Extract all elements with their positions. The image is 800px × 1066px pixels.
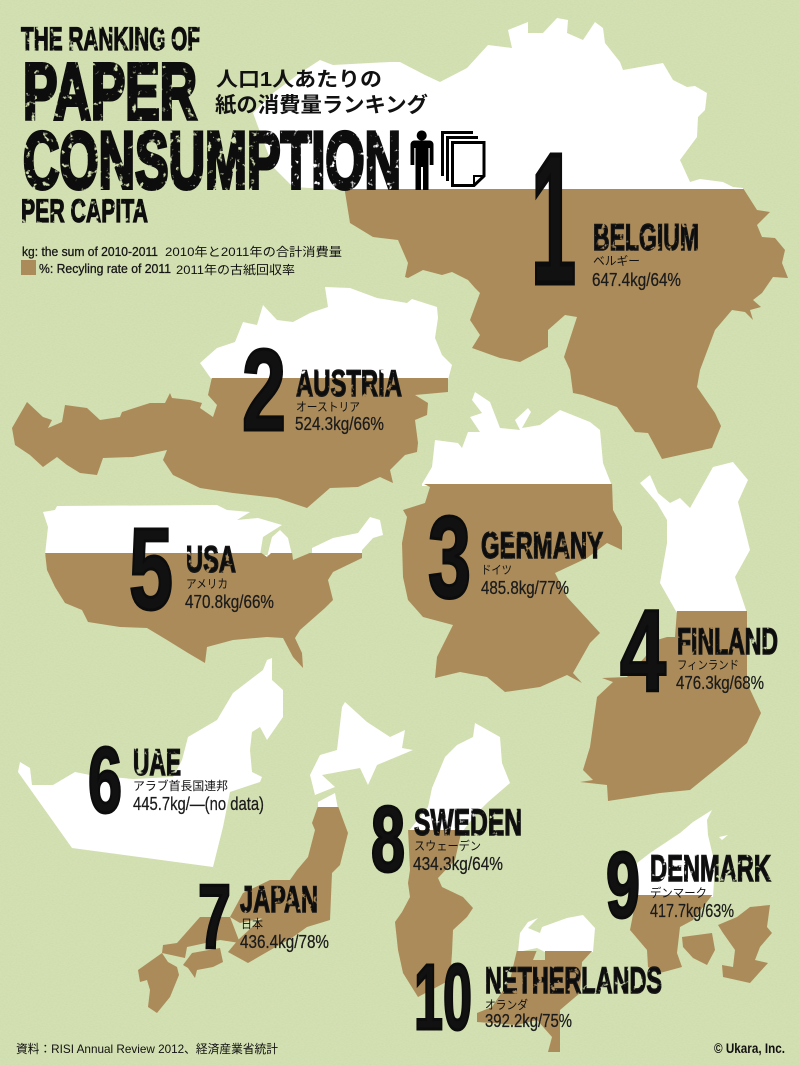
rank 5: USA: アメリカ (186, 577, 228, 591)
rank 1: Belgium: BELGIUM (593, 217, 699, 258)
rank 1: Belgium (531, 116, 699, 323)
rank 10: Netherlands (414, 945, 662, 1049)
rank 2: Austria: AUSTRIA (296, 363, 402, 404)
japanese heading: 紙の消費量ランキング (215, 93, 428, 117)
rank 7: Japan (198, 867, 329, 968)
rank 3: Germany: 485.8kg/77% (481, 578, 569, 598)
rank 4: Finland: 476.3kg/68% (676, 673, 764, 693)
rank 6: UAE: 6 (88, 728, 122, 832)
rank 6: UAE: 445.7kg/—(no data) (133, 794, 264, 814)
rank 7: Japan: 日本 (241, 917, 263, 931)
title: The Ranking of Paper Consumption per Capita: THE RANKING OF (21, 21, 200, 57)
map: UAE, no data (18, 658, 283, 867)
rank 1: Belgium: 647.4kg/64% (592, 270, 681, 290)
rank 5: USA (129, 504, 274, 634)
rank 7: Japan: JAPAN (240, 879, 318, 920)
rank 1: Belgium: 1 (531, 116, 576, 323)
rank 10: Netherlands: オランダ (485, 997, 528, 1012)
title: The Ranking of Paper Consumption per Capita: CONSUMPTION (23, 116, 401, 206)
rank 1: Belgium: ベルギー (593, 254, 640, 268)
icon: person (410, 130, 434, 190)
title: The Ranking of Paper Consumption per Capita: PER CAPITA (21, 193, 148, 229)
map: Sweden, 64% recycled (395, 723, 510, 997)
rank 3: Germany (428, 492, 603, 622)
rank 2: Austria: 524.3kg/66% (295, 414, 384, 434)
legend: 2010年と2011年の合計消費量 (165, 244, 342, 259)
rank 6: UAE: アラブ首長国連邦 (133, 778, 228, 793)
rank 3: Germany: GERMANY (481, 525, 603, 566)
rank 10: Netherlands: 392.2kg/75% (485, 1011, 572, 1031)
rank 5: USA: 470.8kg/66% (185, 592, 274, 612)
rank 4: Finland: 4 (620, 586, 666, 716)
rank 3: Germany: 3 (428, 492, 471, 622)
rank 4: Finland: フィンランド (677, 658, 739, 672)
rank 9: Denmark: 417.7kg/63% (650, 901, 734, 921)
rank 6: UAE: UAE (133, 742, 181, 783)
map: Japan, 78% recycled (138, 702, 413, 1013)
rank 7: Japan: 7 (198, 867, 231, 968)
rank 10: Netherlands: 10 (414, 945, 472, 1049)
rank 9: Denmark: デンマーク (650, 885, 707, 900)
rank 2: Austria (242, 325, 402, 455)
icon: stack of paper (442, 132, 484, 186)
rank 9: Denmark: 9 (606, 833, 640, 937)
rank 8: Sweden: 434.3kg/64% (413, 854, 503, 874)
source note: 資料：RISI Annual Review 2012、経済産業省統計 (16, 1041, 278, 1056)
copyright: © Ukara, Inc. (714, 1040, 785, 1056)
rank 2: Austria: オーストリア (296, 400, 360, 414)
rank 10: Netherlands: NETHERLANDS (485, 960, 662, 1001)
map: Finland, 68% recycled (580, 462, 761, 801)
map: Austria, 66% recycled (12, 287, 452, 508)
map: Belgium, 64% recycled (253, 18, 788, 459)
rank 8: Sweden (371, 787, 522, 891)
map: Netherlands, 75% recycled (477, 915, 595, 1052)
legend: %: Recyling rate of 2011 (39, 261, 171, 276)
legend (21, 244, 342, 277)
map: USA, 66% recycled (43, 505, 383, 668)
rank 9: Denmark (606, 833, 771, 937)
rank 5: USA: 5 (129, 504, 173, 634)
rank 5: USA: USA (186, 539, 236, 580)
title: The Ranking of Paper Consumption per Capita: PAPER (23, 47, 197, 136)
map: Germany, 77% recycled (402, 392, 622, 692)
rank 2: Austria: 2 (242, 325, 286, 455)
legend: kg: the sum of 2010-2011 (22, 244, 158, 259)
rank 7: Japan: 436.4kg/78% (240, 932, 329, 952)
rank 4: Finland (620, 586, 778, 716)
rank 8: Sweden: スウェーデン (414, 838, 481, 853)
rank 8: Sweden: 8 (371, 787, 405, 891)
japanese heading: 人口1人あたりの (216, 68, 382, 91)
rank 8: Sweden: SWEDEN (414, 802, 522, 843)
legend: 2011年の古紙回収率 (176, 262, 295, 277)
rank 6: UAE (88, 728, 264, 832)
title: The Ranking of Paper Consumption per Capita (21, 21, 401, 229)
map: Denmark, 63% recycled (630, 810, 772, 983)
japanese heading (215, 68, 428, 117)
rank 3: Germany: ドイツ (481, 563, 512, 577)
